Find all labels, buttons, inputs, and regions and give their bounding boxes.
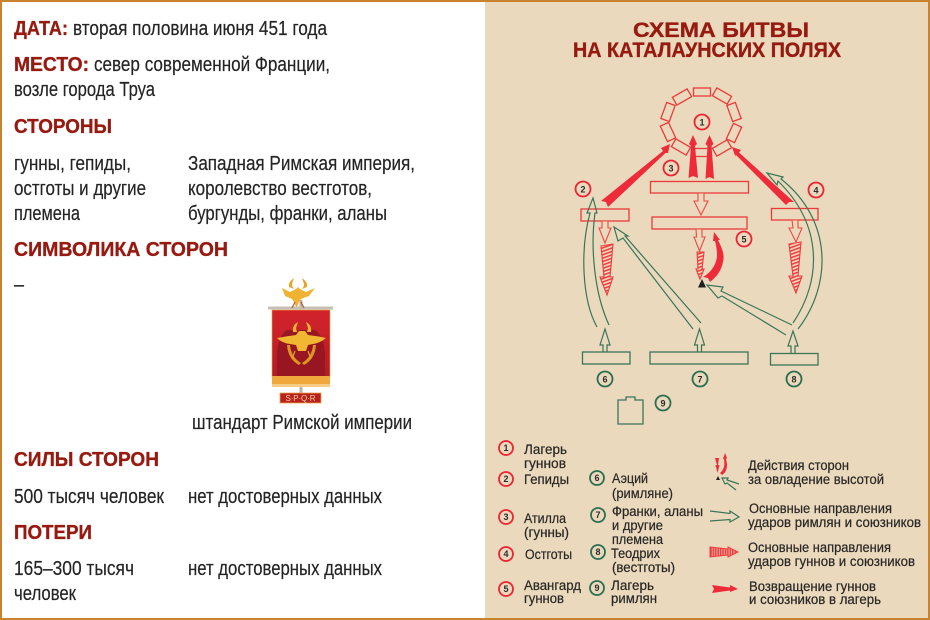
panel: battle scheme bbox=[485, 0, 930, 620]
legend item 7: Франки, аланы bbox=[612, 504, 703, 519]
heading: losses: ПОТЕРИ bbox=[14, 521, 92, 544]
legend item 6: (римляне) bbox=[612, 486, 673, 501]
text: losses bbox=[14, 558, 382, 605]
number markers on the scheme: 5 bbox=[741, 234, 747, 244]
heading: symbols: СИМВОЛИКА СТОРОН bbox=[14, 238, 228, 261]
title: НА КАТАЛАУНСКИХ ПОЛЯХ bbox=[573, 38, 842, 62]
legend item 6 bbox=[590, 471, 673, 501]
curved arrow: Hun vanguard to the height bbox=[703, 232, 724, 282]
legend item 5 bbox=[499, 578, 581, 606]
legend item 8: (вестготы) bbox=[612, 560, 675, 575]
date: вторая половина июня 451 года bbox=[73, 18, 328, 40]
text: losses: человек bbox=[14, 583, 76, 605]
legend: Roman strikes: Основные направления bbox=[749, 501, 892, 516]
green advance arrows bbox=[584, 173, 822, 353]
number markers on the scheme: 1 bbox=[699, 118, 705, 128]
text: Roman side: бургунды, франки, аланы bbox=[188, 203, 387, 225]
text: no Hun symbol: – bbox=[14, 274, 25, 296]
text: Hun side bbox=[14, 153, 146, 225]
place bbox=[14, 53, 330, 101]
legend item 5: 5 bbox=[503, 584, 509, 594]
legend item 8 bbox=[591, 545, 675, 575]
red assault arrows bbox=[599, 193, 802, 295]
legend item 9 bbox=[590, 578, 657, 606]
text: Roman side: Западная Римская империя, bbox=[188, 153, 415, 175]
legend item 1 bbox=[499, 441, 567, 471]
legend item 1: Лагерь bbox=[524, 442, 567, 457]
text: Roman side: королевство вестготов, bbox=[188, 178, 372, 200]
Roman unit blocks bbox=[582, 352, 818, 365]
legend item 7: племена bbox=[612, 532, 663, 547]
legend item 6: 6 bbox=[594, 473, 600, 483]
legend item 8: 8 bbox=[595, 547, 601, 557]
heading: sides: СТОРОНЫ bbox=[14, 115, 112, 138]
place: север современной Франции, bbox=[94, 54, 330, 76]
legend item 2: 2 bbox=[503, 474, 509, 484]
number markers on the scheme: 9 bbox=[660, 398, 666, 408]
number markers on the scheme bbox=[576, 114, 824, 410]
legend item 7: и другие bbox=[612, 518, 663, 533]
legend item 7 bbox=[591, 504, 703, 547]
return arrows to the camp bbox=[601, 135, 794, 207]
legend: fight for the height: за овладение высотой bbox=[748, 472, 884, 487]
legend: fight for the height: Действия сторон bbox=[748, 458, 849, 473]
legend: Hun strikes bbox=[710, 540, 915, 569]
legend: return to camp: и союзников в лагерь bbox=[749, 592, 881, 607]
caption: standard: штандарт Римской империи bbox=[192, 412, 412, 434]
legend item 2 bbox=[499, 472, 569, 487]
legend item 9: 9 bbox=[594, 583, 600, 593]
legend: return to camp: Возвращение гуннов bbox=[749, 579, 876, 594]
date: ДАТА: bbox=[14, 17, 68, 40]
legend item 4: Остготы bbox=[525, 547, 572, 562]
text: forces bbox=[14, 486, 382, 508]
title: СХЕМА БИТВЫ bbox=[633, 18, 809, 42]
text: forces: 500 тысяч человек bbox=[14, 486, 164, 508]
icon: height marker bbox=[698, 279, 706, 288]
legend item 1: гуннов bbox=[524, 456, 566, 471]
title bbox=[573, 18, 842, 62]
legend item 3: Атилла bbox=[524, 511, 566, 526]
icon: Roman standard: S·P·Q·R bbox=[286, 394, 316, 403]
legend item 9: римлян bbox=[611, 591, 657, 606]
castle: Roman camp bbox=[618, 397, 643, 424]
legend: Hun strikes: ударов гуннов и союзников bbox=[748, 554, 915, 569]
legend: Roman strikes bbox=[710, 501, 921, 530]
number markers on the scheme: 6 bbox=[602, 374, 608, 384]
text: Hun side: остготы и другие bbox=[14, 178, 146, 200]
legend: numbered items bbox=[499, 441, 703, 606]
number markers on the scheme: 8 bbox=[791, 374, 797, 384]
legend item 7: 7 bbox=[595, 510, 601, 520]
legend item 3: 3 bbox=[503, 512, 509, 522]
legend item 4 bbox=[499, 547, 572, 562]
legend item 5: гуннов bbox=[524, 591, 564, 606]
legend item 2: Гепиды bbox=[524, 472, 569, 487]
date bbox=[14, 17, 328, 40]
legend item 9: Лагерь bbox=[611, 578, 654, 593]
legend item 5: Авангард bbox=[524, 578, 581, 593]
number markers on the scheme: 3 bbox=[668, 164, 674, 174]
place: возле города Труа bbox=[14, 79, 156, 101]
panel: facts bbox=[0, 0, 485, 620]
heading: forces: СИЛЫ СТОРОН bbox=[14, 448, 159, 471]
icon: Roman standard bbox=[268, 278, 333, 403]
legend: Roman strikes: ударов римлян и союзников bbox=[748, 515, 921, 530]
number markers on the scheme: 4 bbox=[813, 186, 819, 196]
legend: fight for the height bbox=[715, 453, 884, 490]
legend: arrows bbox=[710, 453, 921, 607]
number markers on the scheme: 2 bbox=[580, 184, 586, 194]
legend item 6: Аэций bbox=[612, 471, 648, 486]
text: losses: 165–300 тысяч bbox=[14, 558, 134, 580]
legend item 3: (гунны) bbox=[524, 525, 569, 540]
text: Hun side: племена bbox=[14, 203, 81, 225]
text: Roman side bbox=[188, 153, 415, 225]
Hun unit blocks bbox=[581, 182, 818, 229]
Hun camp ring bbox=[660, 88, 742, 156]
legend item 1: 1 bbox=[503, 443, 509, 453]
text: forces: нет достоверных данных bbox=[188, 486, 382, 508]
text: Hun side: гунны, гепиды, bbox=[14, 153, 131, 175]
legend item 4: 4 bbox=[503, 549, 509, 559]
number markers on the scheme: 7 bbox=[697, 374, 703, 384]
legend: Hun strikes: Основные направления bbox=[748, 540, 891, 555]
legend item 3 bbox=[499, 510, 569, 540]
text: losses: нет достоверных данных bbox=[188, 558, 382, 580]
legend: return to camp bbox=[712, 579, 881, 607]
place: МЕСТО: bbox=[14, 53, 89, 76]
legend item 8: Теодрих bbox=[611, 546, 660, 561]
